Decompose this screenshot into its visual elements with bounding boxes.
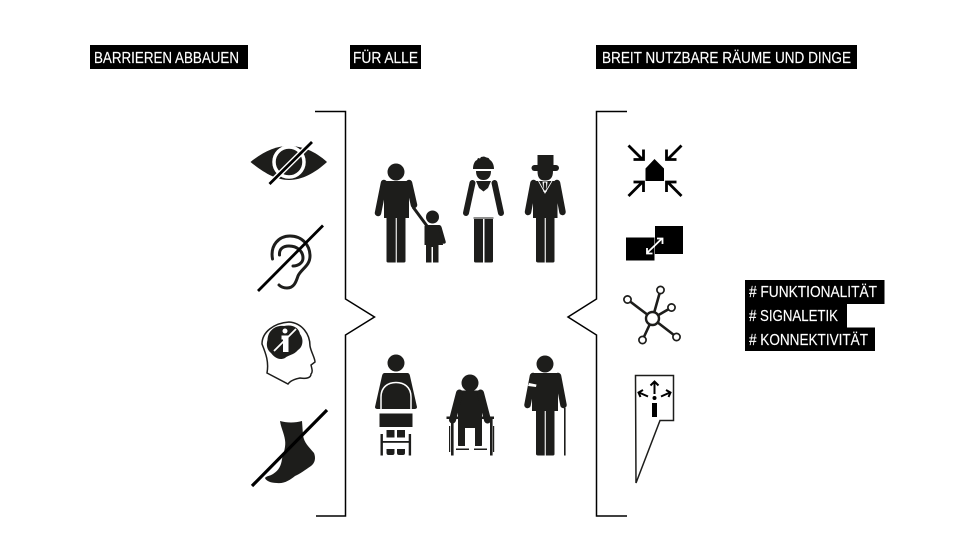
icon: head with brain and crossed-out info (262, 322, 315, 384)
heading: Für alle: FÜR ALLE (353, 49, 418, 67)
person: elderly person with cane and armband (528, 356, 566, 456)
person: construction worker (466, 156, 501, 262)
heading: Für alle (350, 45, 421, 69)
icon: network nodes (624, 286, 680, 344)
heading: Breit nutzbare Räume und Dinge (596, 45, 857, 69)
person: adult holding child's hand (378, 164, 444, 262)
hashtag: Konnektivität: # KONNEKTIVITÄT (749, 332, 868, 349)
hashtag list (745, 280, 884, 351)
person: wheelchair user (446, 374, 494, 456)
icon: crossed-out foot (252, 410, 327, 486)
left curly bracket (315, 112, 374, 516)
person: child (424, 210, 444, 262)
person: man with top hat and suit (528, 155, 562, 262)
icon: crossed-out eye (250, 142, 327, 184)
person: woman pushing stroller (375, 354, 417, 456)
heading: Barrieren abbauen: BARRIEREN ABBAUEN (94, 50, 239, 67)
hashtag: Funktionalität: # FUNKTIONALITÄT (749, 284, 877, 301)
icon: crossed-out ear (258, 226, 323, 291)
heading: Breit nutzbare Räume und Dinge: BREIT NUTZBARE RÄUME UND DINGE (602, 50, 851, 67)
right curly bracket (568, 112, 627, 516)
icon: information sign with arrows (636, 376, 674, 483)
hashtag: Signaletik: # SIGNALETIK (749, 308, 839, 325)
icon: overlapping squares with double arrow (626, 226, 683, 260)
icon: assembly point with arrows (628, 146, 682, 196)
heading: Barrieren abbauen (90, 45, 248, 69)
